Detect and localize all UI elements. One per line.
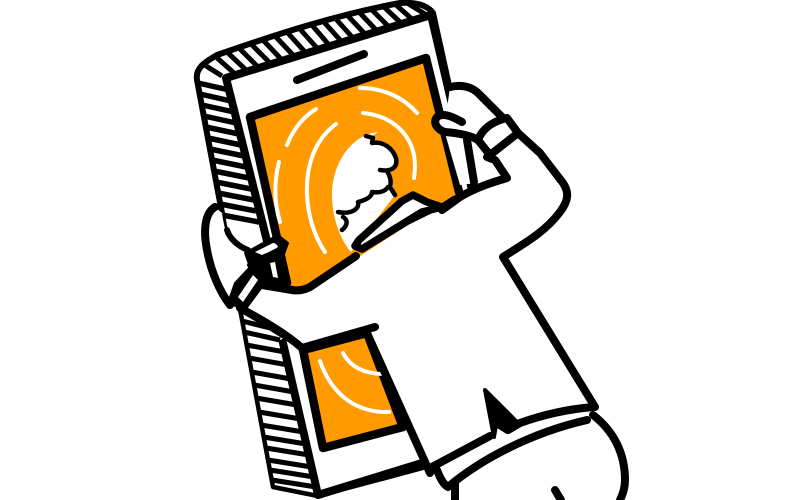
left thumb and cuff [228, 235, 288, 310]
right shoulder and sleeve edge [442, 157, 507, 210]
head [332, 132, 396, 252]
lower left hatching [242, 321, 316, 487]
thumb [435, 115, 478, 140]
left hand [205, 207, 288, 310]
lower inner edges [283, 343, 422, 495]
upper arm edge [262, 256, 356, 290]
signal arcs on screen [275, 88, 417, 252]
hem band [437, 420, 587, 487]
shirt hem and fold [430, 390, 593, 487]
lower screen [303, 333, 403, 448]
phone: lower part [240, 309, 430, 496]
pants [455, 415, 625, 500]
side strip [270, 262, 278, 278]
phone inner edges [226, 15, 472, 245]
top edge hatching [203, 3, 425, 76]
phone: upper part [197, 3, 472, 295]
lower arcs [320, 353, 389, 412]
body left edge [367, 333, 430, 473]
lower arm edge [240, 308, 375, 348]
collar [355, 195, 442, 249]
cuff strip [238, 275, 258, 302]
screen [250, 58, 459, 295]
right cuff [478, 118, 518, 155]
left edge hatching [198, 83, 259, 222]
hair [338, 136, 396, 230]
thumb highlight [255, 243, 278, 255]
body with sleeve and shirt [240, 118, 595, 473]
speaker bar [297, 54, 364, 80]
right hand [435, 86, 518, 185]
